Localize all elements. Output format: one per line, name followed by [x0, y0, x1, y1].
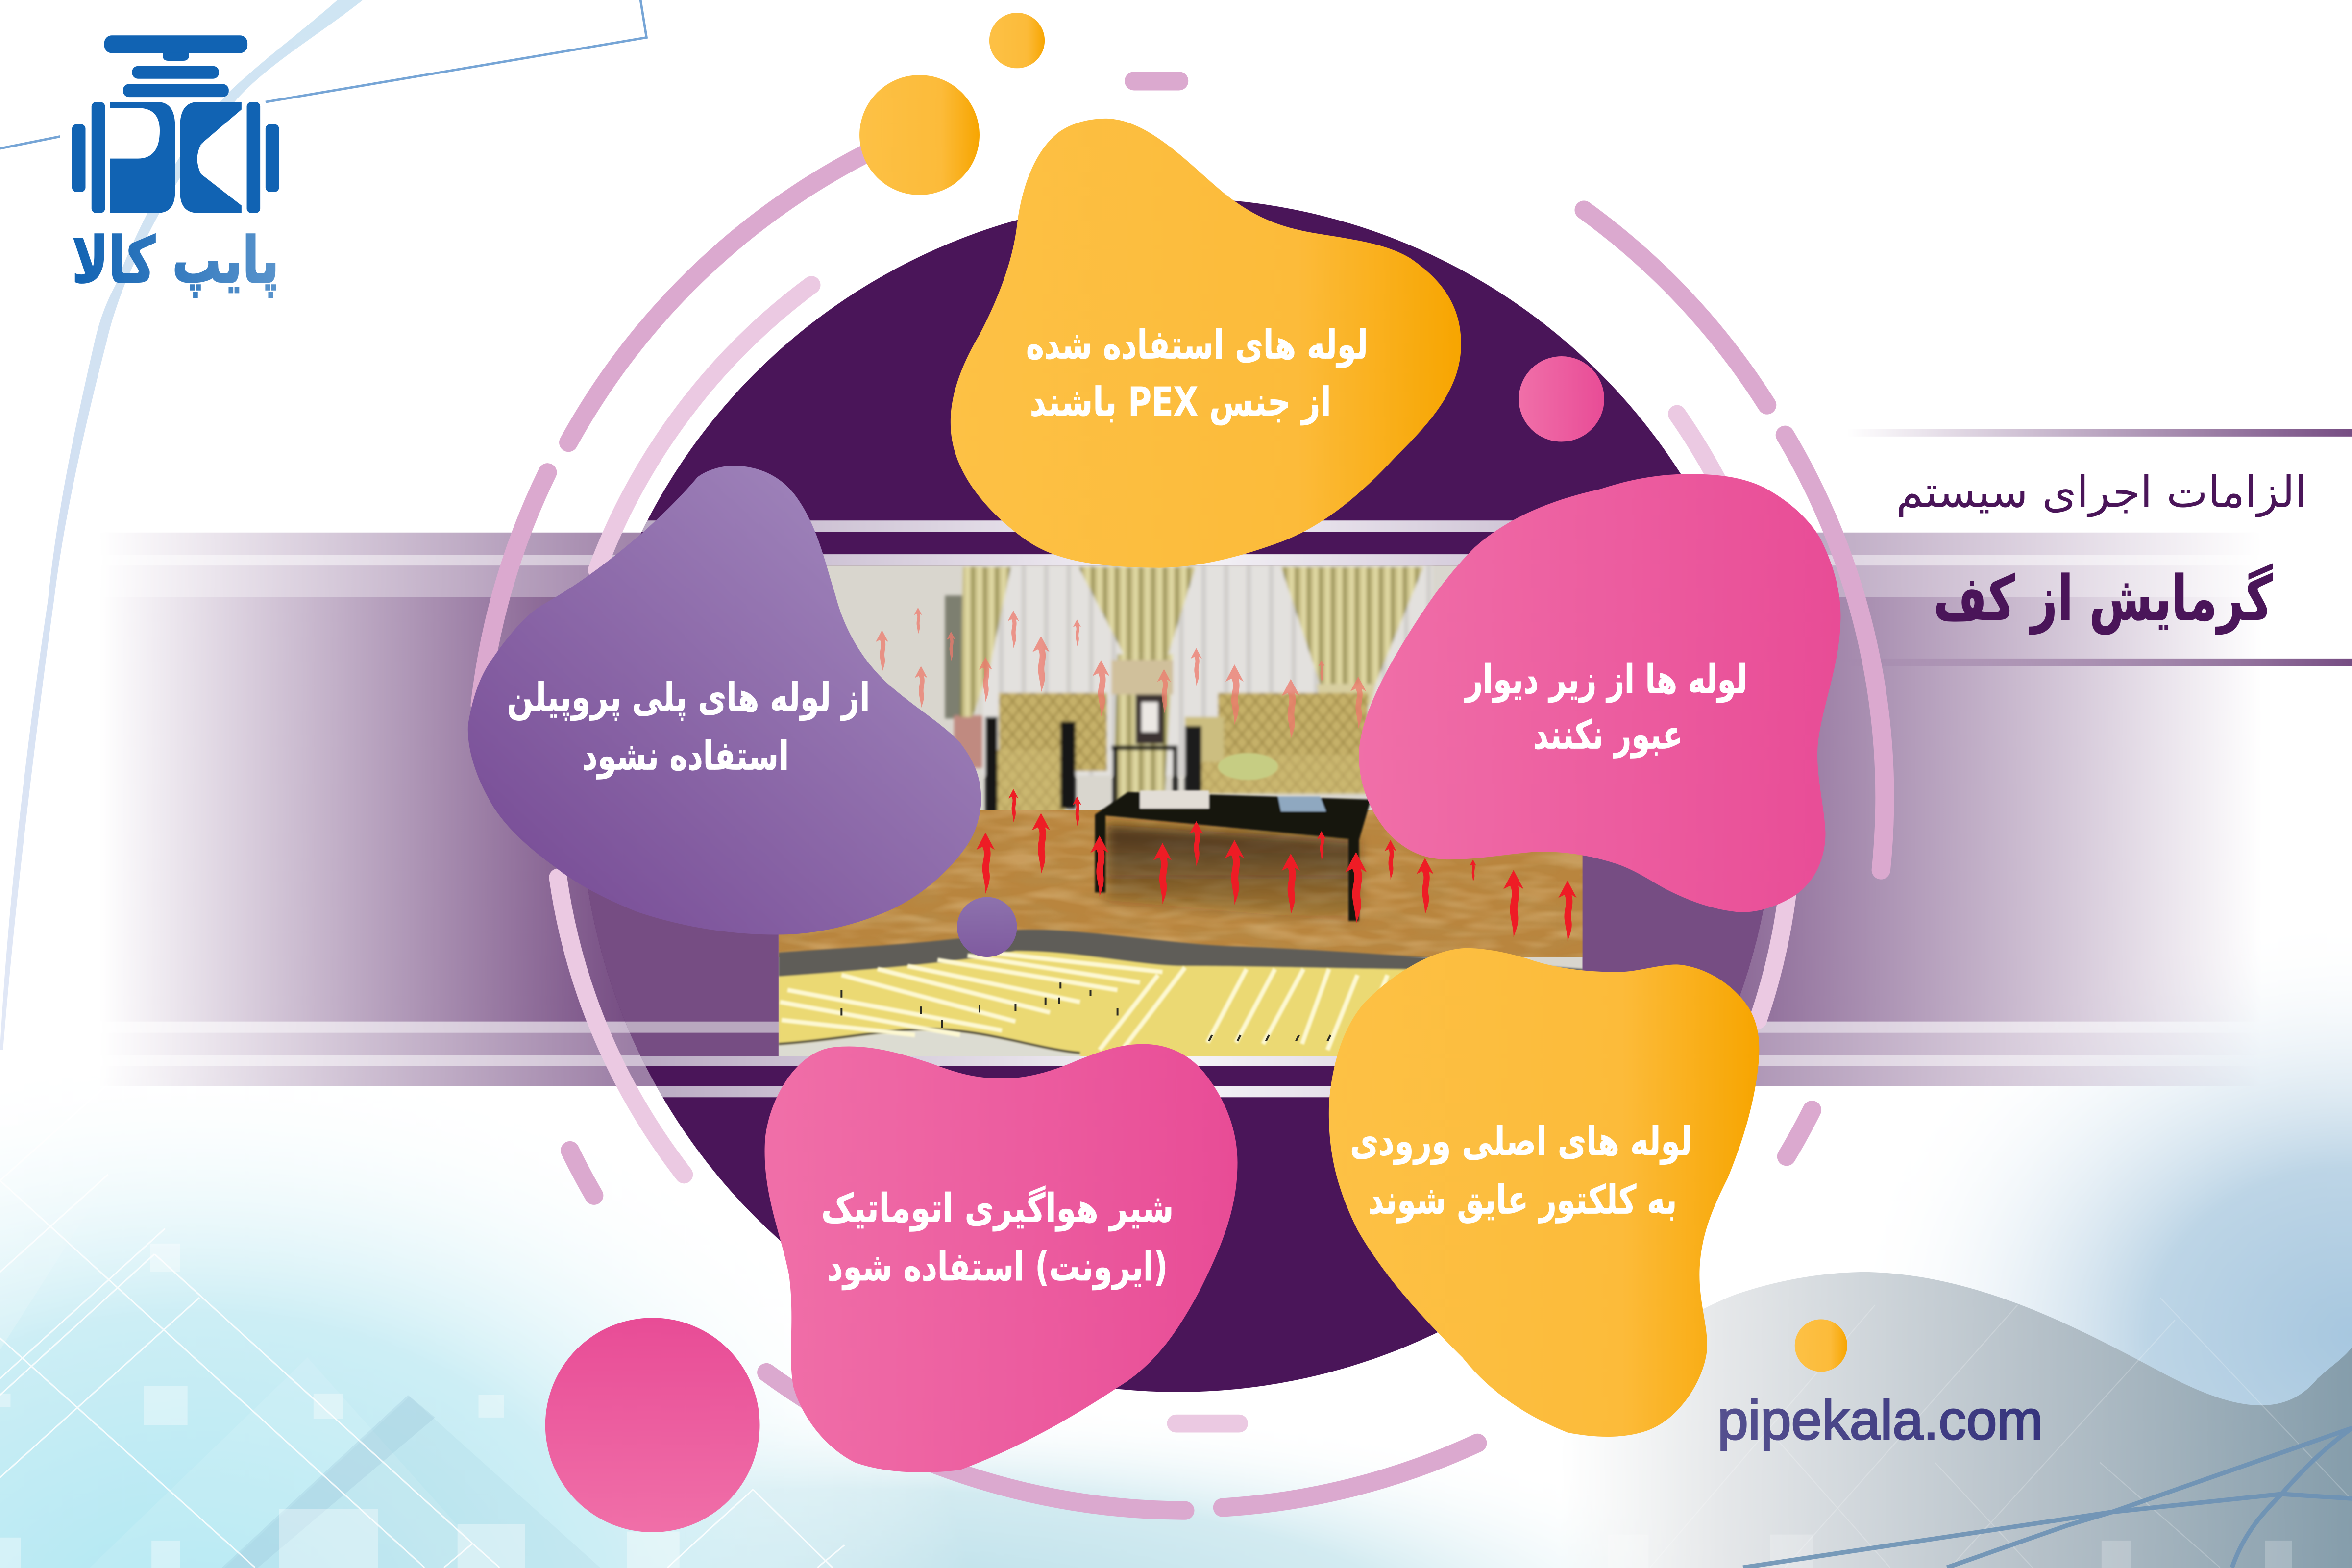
- outer ring segments: [480, 81, 1885, 1511]
- decorative circles: [545, 13, 1847, 1532]
- room furniture and curtains: [945, 565, 1432, 813]
- blob: air vent valve: [765, 1044, 1238, 1472]
- floor layers: [779, 930, 1584, 1057]
- blob: not under walls: [1359, 474, 1840, 912]
- background band: [99, 533, 2262, 1086]
- header subtitle: الزامات اجرای سیستم: [1896, 467, 2307, 518]
- blob: not under walls: عبور نکنند: [1533, 712, 1683, 759]
- heating pipes: [780, 953, 1388, 1050]
- logo: Pipe Kala: [72, 35, 279, 298]
- faint heat arrows: [876, 608, 1366, 739]
- patterned rug: [779, 810, 1584, 957]
- background: thin blue outline: [0, 0, 646, 148]
- blob: insulated main pipes: لوله های اصلی ورودی: [1350, 1119, 1692, 1165]
- blob: insulated main pipes: [1329, 948, 1759, 1437]
- blob: not under walls: لوله ها از زیر دیوار: [1464, 657, 1747, 703]
- blob: no polypropylene pipes: از لوله های پلی پروپیلن: [507, 675, 870, 721]
- blob: PEX pipes: لوله های استفاده شده: [1026, 322, 1368, 368]
- blob: PEX pipes: [951, 119, 1461, 568]
- blob: PEX pipes: از جنس PEX باشند: [1030, 379, 1331, 425]
- background: top-left pale arc: [0, 0, 363, 1050]
- website url: pipekala.com: [1717, 1389, 2043, 1451]
- background: bottom-right wave: [1560, 900, 2352, 1568]
- logo: Pipe Kala: پایپ کالا: [72, 224, 279, 298]
- small purple dot: [957, 897, 1017, 957]
- background: teal geometric corner: [0, 1050, 1725, 1568]
- blob: air vent valve: (ایرونت) استفاده شود: [827, 1244, 1168, 1290]
- central dark purple circle: [570, 198, 1785, 1392]
- header stripes: [1846, 429, 2352, 666]
- red heat arrows: [976, 789, 1577, 942]
- blob: no polypropylene pipes: [468, 466, 981, 934]
- photo: underfloor heating living room: [779, 565, 1584, 1057]
- inner ring segments: [558, 285, 1788, 1423]
- blob: air vent valve: شیر هواگیری اتوماتیک: [821, 1185, 1174, 1231]
- coffee table: [1095, 753, 1371, 923]
- blob: insulated main pipes: به کلکتور عایق شوند: [1368, 1177, 1677, 1224]
- blob: no polypropylene pipes: استفاده نشود: [582, 733, 789, 779]
